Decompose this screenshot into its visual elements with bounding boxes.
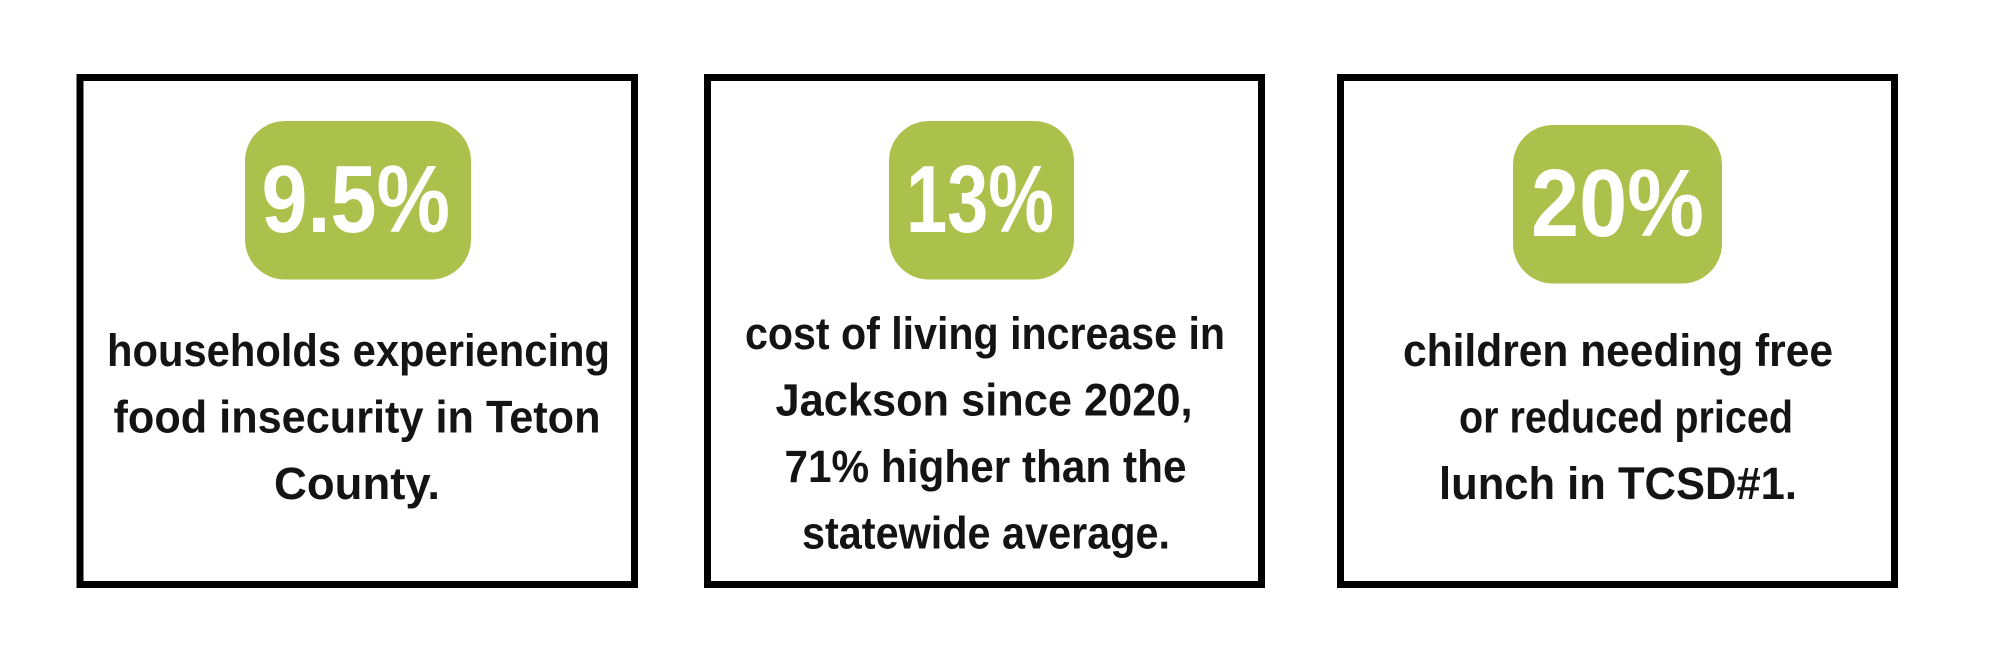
stat badge: 13%: 13% <box>906 146 1054 253</box>
stat badge: 13% <box>889 121 1074 280</box>
description text: lunch in TCSD#1. <box>1439 458 1797 509</box>
panel: households experiencing food insecurity <box>80 78 634 584</box>
description text: households experiencing <box>107 325 610 376</box>
description text: County. <box>274 458 440 509</box>
description text: Jackson since 2020, <box>776 374 1192 426</box>
panel frame <box>708 78 1262 584</box>
description text: statewide average. <box>802 508 1170 558</box>
description text: or reduced priced <box>1459 392 1793 442</box>
description text: children needing free <box>1403 325 1833 376</box>
panel frame <box>1340 78 1894 584</box>
stat badge: 20%: 20% <box>1531 150 1704 257</box>
description text <box>107 325 610 509</box>
panel: cost of living increase <box>708 78 1262 584</box>
stat badge: 9.5% <box>245 121 471 280</box>
description text: food insecurity in Teton <box>114 392 600 442</box>
description text <box>1403 325 1833 509</box>
stat badge: 9.5%: 9.5% <box>262 146 450 253</box>
description text <box>745 308 1225 558</box>
panel: children needing free or reduced priced lunch <box>1340 78 1894 584</box>
description text: cost of living increase in <box>745 308 1225 359</box>
stat badge: 20% <box>1513 125 1722 284</box>
description text: 71% higher than the <box>784 441 1186 492</box>
panel frame <box>80 78 634 584</box>
